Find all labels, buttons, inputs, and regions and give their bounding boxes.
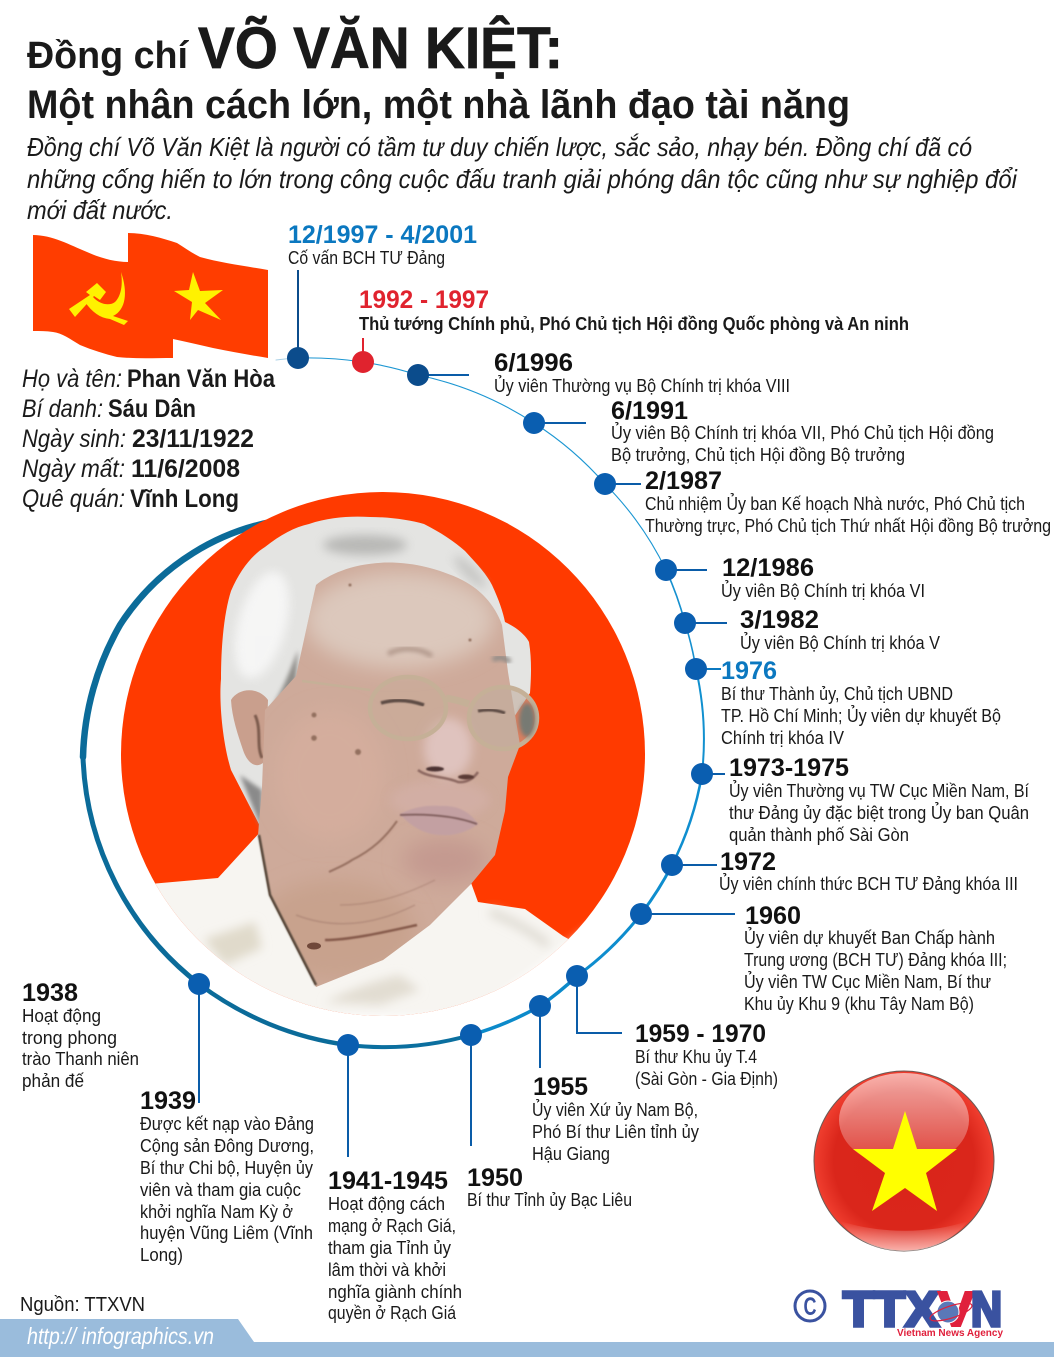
- event: 1960: [744, 902, 1007, 1014]
- logo: TTXVN: Vietnam News Agency: [897, 1327, 1003, 1339]
- mouth: [400, 806, 478, 835]
- nose: [424, 718, 472, 778]
- personal information: Phan Văn Hòa: [127, 365, 276, 393]
- title: VÕ VĂN KIỆT:: [198, 16, 563, 81]
- event: 1960: Trung ương (BCH TƯ) Đảng khóa III;: [744, 950, 1007, 970]
- creases: [296, 821, 435, 940]
- event: 1939: huyện Vũng Liêm (Vĩnh: [140, 1223, 313, 1243]
- event: 1973-1975: [729, 754, 1029, 845]
- event: 1941-1945: Hoạt động cách: [328, 1194, 445, 1214]
- hair: [220, 517, 531, 830]
- neck shadow: [259, 835, 316, 985]
- logo: TTXVN: V: [938, 1283, 974, 1337]
- event: 1938: Hoạt động: [22, 1006, 101, 1026]
- red portrait disc: [121, 492, 645, 1016]
- event: 1939: Cộng sản Đông Dương,: [140, 1136, 314, 1156]
- personal information: Họ và tên:: [22, 365, 122, 393]
- personal information: 11/6/2008: [131, 455, 240, 483]
- personal information: [22, 365, 276, 513]
- personal information: 23/11/1922: [132, 425, 254, 453]
- source: Nguồn: TTXVN: [20, 1294, 145, 1316]
- event: 1939: Bí thư Chi bộ, Huyện ủy: [140, 1158, 313, 1178]
- connector lines: [199, 270, 735, 1157]
- event: 1973-1975: thư Đảng ủy đặc biệt trong Ủy ban Quân: [729, 802, 1029, 823]
- personal information: Vĩnh Long: [130, 485, 239, 513]
- skin: face and neck: [258, 562, 520, 987]
- event: 6/1991: [611, 397, 994, 465]
- event: 3/1982: 3/1982: [740, 606, 819, 634]
- event: 1939: [140, 1087, 314, 1265]
- event: 3/1982: Ủy viên Bộ Chính trị khóa V: [740, 632, 940, 653]
- footer band with URL: [0, 1319, 1054, 1357]
- event: 1950: Bí thư Tỉnh ủy Bạc Liêu: [467, 1190, 632, 1210]
- event: 1976: 1976: [721, 657, 777, 685]
- event: 1939: Được kết nạp vào Đảng: [140, 1114, 314, 1134]
- personal information: Bí danh:: [22, 395, 103, 423]
- icon: party and national flags: [33, 233, 268, 358]
- timeline nodes: [188, 347, 713, 1056]
- event: 1959 - 1970: Bí thư Khu ủy T.4: [635, 1047, 757, 1067]
- event: 1939: viên và tham gia cuộc: [140, 1180, 301, 1200]
- shirt: [155, 834, 568, 1016]
- event: 1960: 1960: [745, 902, 801, 930]
- logo: TTXVN: N: [971, 1283, 1002, 1337]
- ear: [231, 690, 268, 765]
- event: 1976: [721, 657, 1001, 748]
- event: 1938: trào Thanh niên: [22, 1049, 139, 1069]
- event: 1939: 1939: [140, 1087, 196, 1115]
- event: 1973-1975: quản thành phố Sài Gòn: [729, 825, 909, 845]
- event: 1992 - 1997: Thủ tướng Chính phủ, Phó Chủ tịch Hội đồng Quốc phòng và An ninh: [359, 314, 909, 334]
- event: 6/1991: 6/1991: [611, 397, 688, 425]
- event: 1955: [532, 1073, 699, 1164]
- event: 1992 - 1997: [359, 286, 909, 334]
- event: 1960: Ủy viên TW Cục Miền Nam, Bí thư: [744, 971, 991, 992]
- event: 12/1997 - 4/2001: [288, 221, 477, 268]
- footer band with URL: http:// infographics.vn: [27, 1323, 214, 1349]
- event: 1941-1945: mạng ở Rạch Giá,: [328, 1216, 456, 1236]
- collar shading: [204, 922, 262, 965]
- title: Một nhân cách lớn, một nhà lãnh đạo tài năng: [27, 83, 850, 127]
- event: 1955: Hậu Giang: [532, 1144, 610, 1164]
- event: 1960: Ủy viên dự khuyết Ban Chấp hành: [744, 927, 995, 948]
- event: 1941-1945: 1941-1945: [328, 1167, 448, 1195]
- event: 1959 - 1970: [635, 1020, 778, 1089]
- title: [27, 16, 850, 127]
- portrait of Võ Văn Kiệt: [155, 516, 584, 1016]
- intro text: Đồng chí Võ Văn Kiệt là người có tầm tư duy chiến lược, sắc sảo, nhạy bén. Đồng chí đã có: [27, 132, 972, 162]
- logo: TTXVN: [795, 1283, 1003, 1339]
- glasses: [302, 677, 537, 749]
- logo: TTXVN: TTX: [843, 1283, 939, 1337]
- eyebrows: [388, 649, 432, 656]
- eyes: [381, 701, 424, 705]
- event: 6/1996: [494, 349, 790, 396]
- event: 1941-1945: quyền ở Rạch Giá: [328, 1303, 457, 1323]
- event: 1955: Ủy viên Xứ ủy Nam Bộ,: [532, 1099, 698, 1120]
- intro text: [27, 132, 1018, 225]
- event: 1938: 1938: [22, 979, 78, 1007]
- personal information: Quê quán:: [22, 485, 125, 513]
- event: 1941-1945: [328, 1167, 462, 1323]
- event: 1955: 1955: [533, 1073, 588, 1101]
- event: 1976: TP. Hồ Chí Minh; Ủy viên dự khuyết Bộ: [721, 705, 1001, 726]
- event: 1992 - 1997: 1992 - 1997: [359, 286, 489, 314]
- event: 1939: Long): [140, 1245, 183, 1265]
- event: 12/1986: 12/1986: [722, 554, 814, 582]
- personal information: Ngày mất:: [22, 455, 125, 483]
- event: 12/1986: Ủy viên Bộ Chính trị khóa VI: [721, 580, 925, 601]
- event: 2/1987: 2/1987: [645, 467, 722, 495]
- event: 3/1982: [740, 606, 940, 653]
- intro text: mới đất nước.: [27, 195, 173, 225]
- event: 12/1997 - 4/2001: Cố vấn BCH TƯ Đảng: [288, 248, 445, 268]
- event: 1973-1975: 1973-1975: [729, 754, 849, 782]
- event: 1955: Phó Bí thư Liên tỉnh ủy: [532, 1122, 699, 1142]
- age spots: [311, 584, 472, 755]
- event: 6/1991: Ủy viên Bộ Chính trị khóa VII, Phó Chủ tịch Hội đồng: [611, 422, 994, 443]
- event: 6/1996: Ủy viên Thường vụ Bộ Chính trị khóa VIII: [494, 375, 790, 396]
- icon: Vietnam flag sphere: [814, 1071, 994, 1251]
- event: 1950: [467, 1164, 632, 1210]
- event: 1938: phản đế: [22, 1071, 84, 1091]
- logo: TTXVN: C: [804, 1293, 816, 1321]
- event: 1972: 1972: [720, 848, 776, 876]
- event: 1939: khởi nghĩa Nam Kỳ ở: [140, 1202, 293, 1222]
- event: 1941-1945: nghĩa giành chính: [328, 1282, 462, 1302]
- event: 12/1997 - 4/2001: 12/1997 - 4/2001: [288, 221, 477, 249]
- personal information: Sáu Dân: [108, 395, 196, 423]
- timeline arc: [83, 358, 704, 1047]
- event: 6/1996: 6/1996: [494, 349, 573, 377]
- event: 1959 - 1970: (Sài Gòn - Gia Định): [635, 1069, 778, 1089]
- event: 1976: Bí thư Thành ủy, Chủ tịch UBND: [721, 684, 953, 704]
- event: 1976: Chính trị khóa IV: [721, 728, 844, 748]
- event: 1938: [22, 979, 139, 1091]
- event: 1972: [719, 848, 1018, 894]
- white fade at the bottom: [342, 922, 584, 1016]
- title: Đồng chí: [27, 35, 189, 77]
- personal information: Ngày sinh:: [22, 425, 126, 453]
- event: 1950: 1950: [467, 1164, 523, 1192]
- event: 1941-1945: tham gia Tỉnh ủy: [328, 1238, 451, 1258]
- event: 1959 - 1970: 1959 - 1970: [635, 1020, 766, 1048]
- event: 6/1991: Bộ trưởng, Chủ tịch Hội đồng Bộ trưởng: [611, 445, 905, 465]
- event: 1938: trong phong: [22, 1028, 117, 1048]
- event: 2/1987: [645, 467, 1051, 536]
- event: 1972: Ủy viên chính thức BCH TƯ Đảng khóa III: [719, 873, 1018, 894]
- event: 1941-1945: lâm thời và khởi: [328, 1260, 446, 1280]
- event: 1960: Khu ủy Khu 9 (khu Tây Nam Bộ): [744, 994, 974, 1014]
- event: 12/1986: [721, 554, 925, 601]
